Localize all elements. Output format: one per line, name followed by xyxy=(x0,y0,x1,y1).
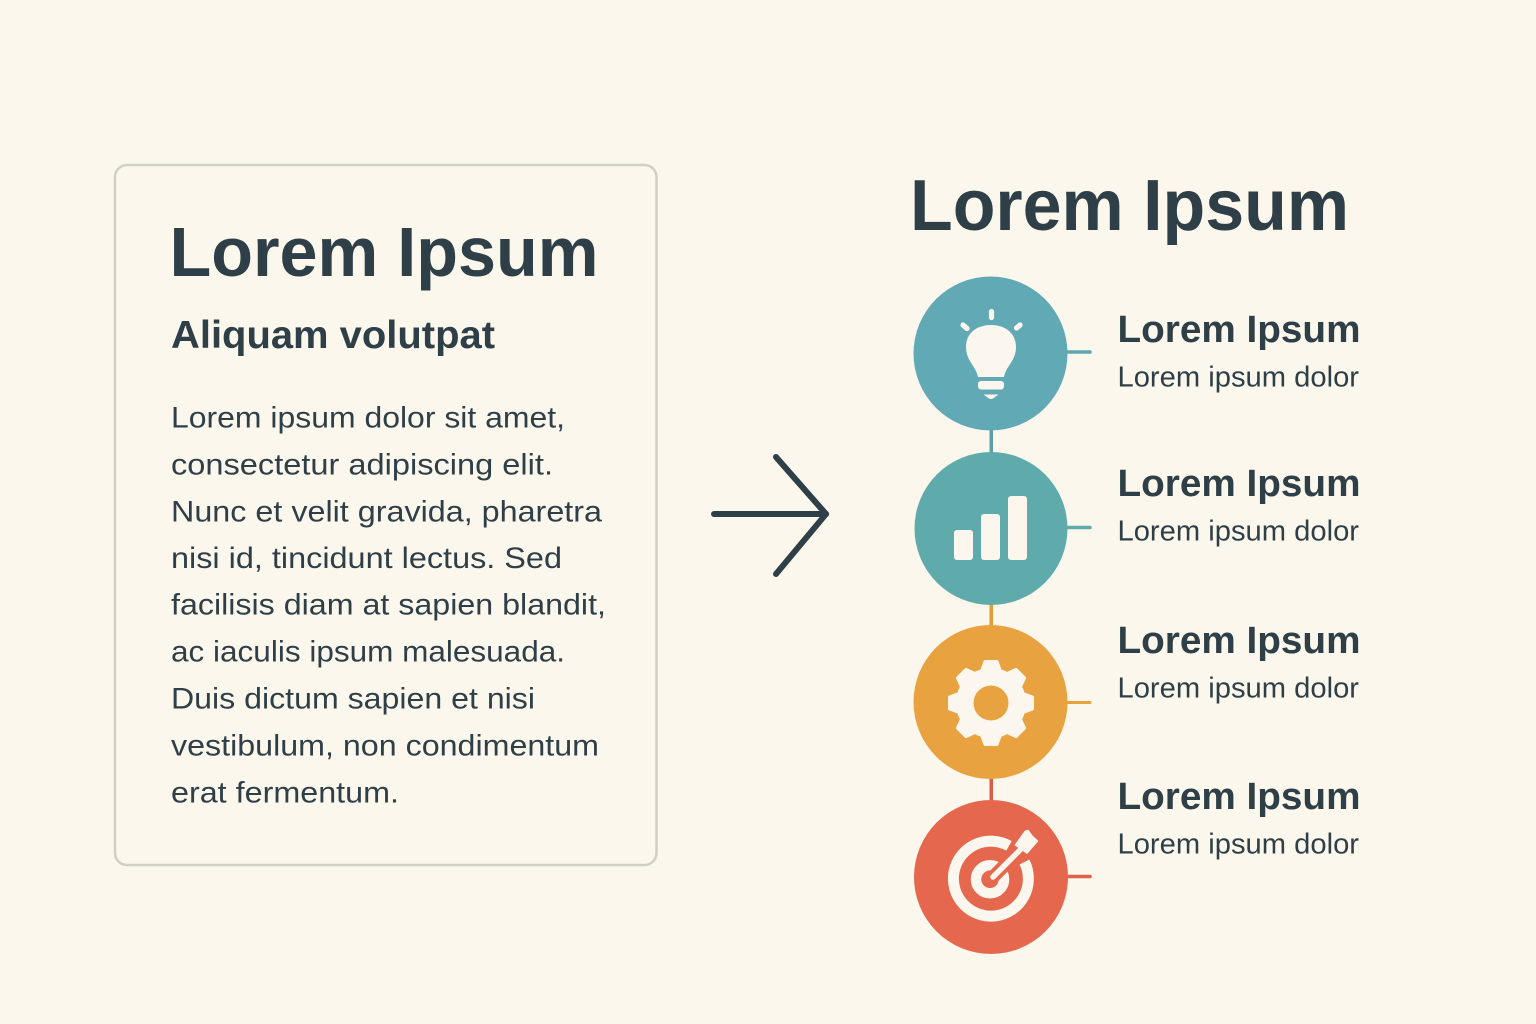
tick: orange xyxy=(1068,701,1090,704)
card subheading: Aliquam volutpat xyxy=(171,314,495,357)
vertical connector: teal xyxy=(990,428,993,455)
circle: red xyxy=(914,800,1068,954)
step 1 description: Lorem ipsum dolor xyxy=(1118,362,1359,394)
card body text: nisi id, tincidunt lectus. Sed xyxy=(171,542,562,575)
card heading: Lorem Ipsum xyxy=(170,213,598,291)
card body text: consectetur adipiscing elit. xyxy=(171,448,553,482)
panel: left text card xyxy=(115,165,656,865)
step 2 title: Lorem Ipsum xyxy=(1118,463,1360,505)
step 3: settings xyxy=(914,620,1360,779)
step 2: chart xyxy=(914,452,1360,605)
step 2 description: Lorem ipsum dolor xyxy=(1118,516,1359,548)
circle: orange xyxy=(914,625,1068,779)
icon: target with arrow xyxy=(953,830,1038,916)
vertical connector: orange xyxy=(990,602,993,628)
card body text: ac iaculis ipsum malesuada. xyxy=(171,636,565,668)
card body text: facilisis diam at sapien blandit, xyxy=(171,588,606,622)
tick: teal green xyxy=(1068,526,1090,529)
right heading: Lorem Ipsum xyxy=(910,166,1349,246)
circle: teal green xyxy=(914,452,1068,605)
vertical connector: red xyxy=(990,776,993,802)
tick: teal xyxy=(1068,350,1090,354)
arrow xyxy=(714,457,826,574)
icon: bar chart xyxy=(954,496,1027,560)
card body text: Lorem ipsum dolor sit amet, xyxy=(171,402,565,434)
circle: blue teal xyxy=(914,276,1068,430)
step 1: idea xyxy=(914,276,1360,430)
card body text: erat fermentum. xyxy=(171,776,399,810)
icon: gear xyxy=(950,662,1032,744)
icon: light bulb xyxy=(963,312,1020,399)
card body text xyxy=(171,402,606,810)
step 4 title: Lorem Ipsum xyxy=(1118,776,1360,818)
step 1 title: Lorem Ipsum xyxy=(1118,309,1360,351)
card body text: Duis dictum sapien et nisi xyxy=(171,682,535,716)
step 3 title: Lorem Ipsum xyxy=(1118,620,1360,662)
card body text: Nunc et velit gravida, pharetra xyxy=(171,496,602,528)
card body text: vestibulum, non condimentum xyxy=(171,730,599,762)
step 4 description: Lorem ipsum dolor xyxy=(1118,828,1359,860)
tick: red xyxy=(1068,875,1090,878)
step 3 description: Lorem ipsum dolor xyxy=(1118,672,1359,704)
step 4: target xyxy=(914,776,1360,954)
card border xyxy=(115,165,656,865)
